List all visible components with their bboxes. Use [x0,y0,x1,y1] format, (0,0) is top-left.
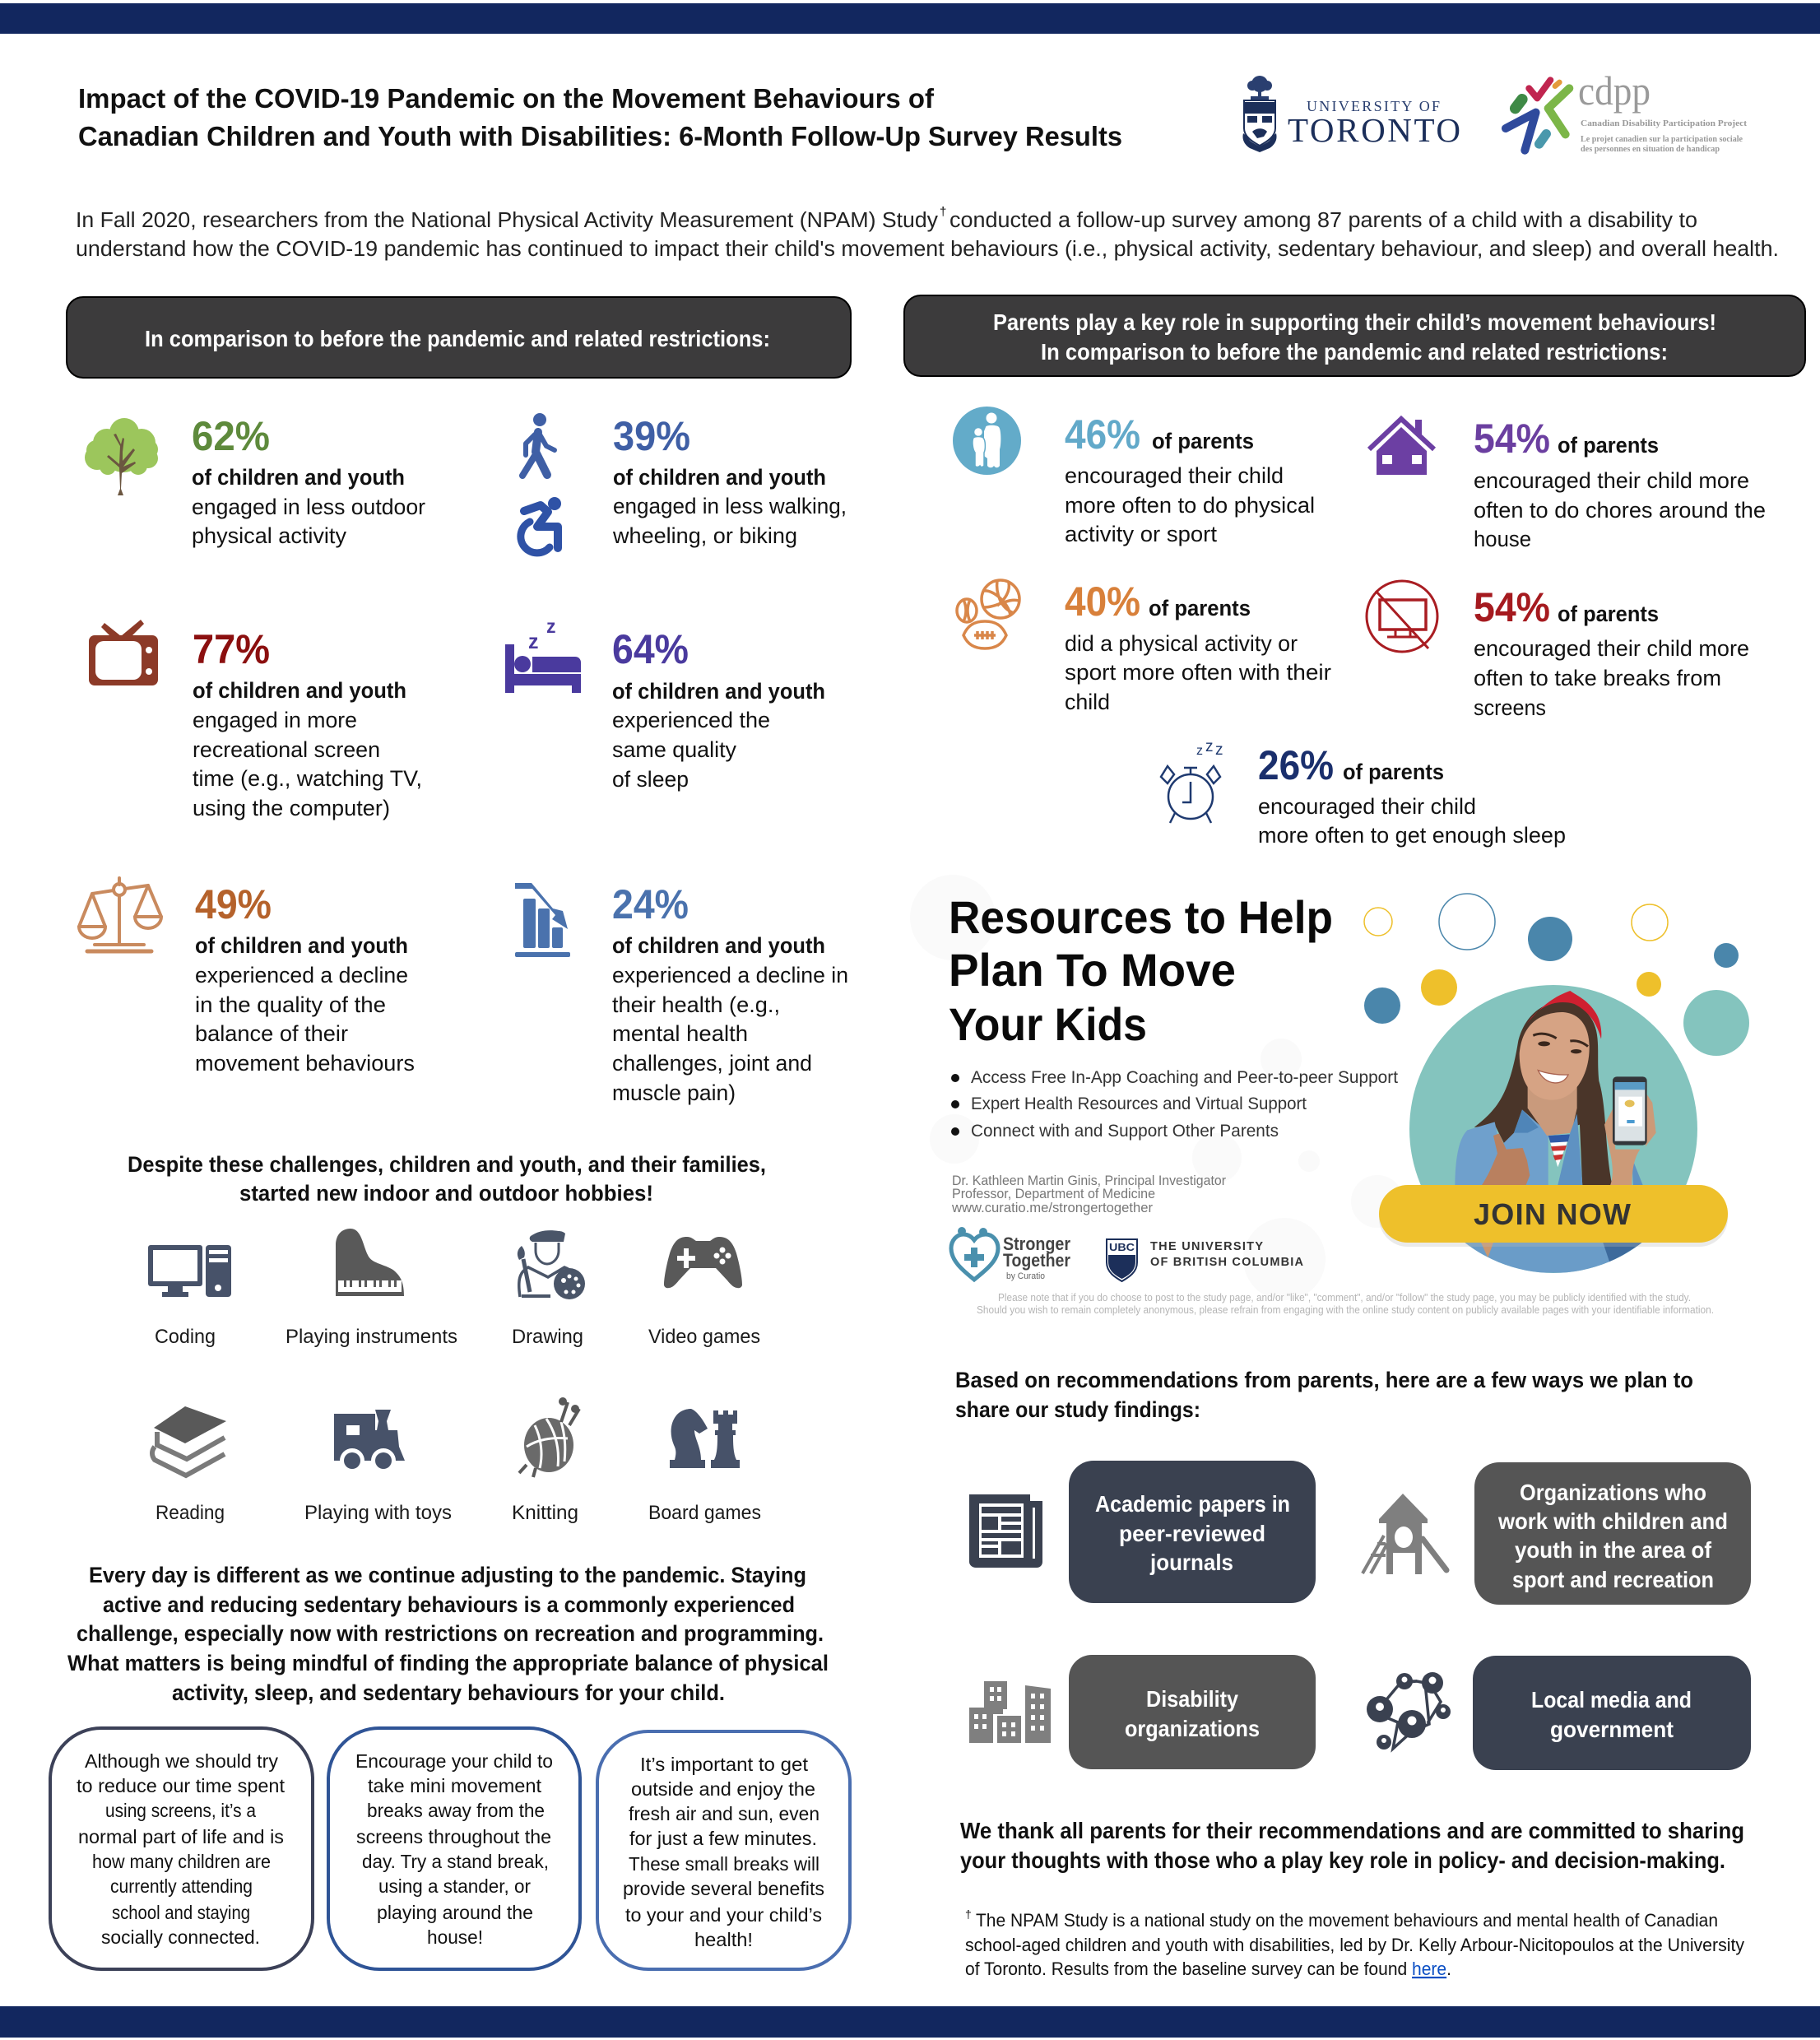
icon: declining bar chart [515,883,570,957]
box: disability organizations: organizations [1125,1716,1260,1741]
stat: 39 percent walking [612,413,847,548]
text: every day message: challenge, especially now with restrictions on recreation and programming. [77,1621,824,1646]
panel: hobbies [148,1229,761,1524]
title: Canadian Children and Youth with Disabilities: 6-Month Follow-Up Survey Results [78,121,1122,151]
stat: 46 percent physical activity: of parents [1152,429,1254,453]
stat: 24 percent health [612,881,848,1105]
button: join now: JOIN NOW [1474,1197,1631,1231]
logo: CDPP: cdpp [1578,67,1651,114]
icon: balance scale [79,878,161,951]
logo: CDPP [1506,67,1747,154]
callout: fresh air: outside and enjoy the [631,1778,815,1800]
title [78,83,1122,151]
text: disclaimer: Please note that if you do choose to post to the study page, and/or "like", "comment", and/or "follow" the study page, you may be publicly identified with the study. [998,1291,1691,1303]
hobby: playing with toys [304,1410,452,1524]
callout: screens are normal: using screens, it’s a [105,1800,257,1821]
stat: 24 percent health: their health (e.g., [612,992,780,1017]
icon: television [89,620,158,685]
heading: despite these challenges [128,1152,766,1206]
hobby: playing instruments: Playing instruments [286,1326,457,1348]
stat: 26 percent sleep [1258,742,1566,848]
text: disclaimer [977,1291,1714,1316]
stat: 77 percent screen time: time (e.g., watching TV, [193,766,422,791]
stat: 64 percent sleep: same quality [612,737,736,762]
box: organizations sport and recreation: Organizations who [1520,1480,1706,1505]
list: benefits: Expert Health Resources and Virtual Support [971,1094,1307,1113]
stat: 54 percent screen breaks [1474,584,1749,720]
callout: screens are normal: normal part of life and is [78,1826,284,1847]
stat: 54 percent chores: house [1474,527,1531,551]
logo: Stronger Together: by Curatio [1006,1271,1045,1281]
box: local media and government [1473,1656,1751,1770]
panel: sharing channels [969,1461,1751,1770]
logo: Stronger Together [951,1227,1070,1281]
logo: CDPP: des personnes en situation de handicap [1581,145,1720,154]
text: investigator credit: Dr. Kathleen Martin Ginis, Principal Investigator [952,1173,1226,1188]
heading: resources: Your Kids [949,998,1147,1050]
hobby: coding [148,1245,231,1348]
hobby: video games [648,1237,760,1348]
stat: 24 percent health: mental health [612,1021,748,1046]
stat: 46 percent physical activity: more often to do physical [1065,493,1315,518]
stat: 62 percent outdoor activity [192,413,425,548]
panel: right header: In comparison to before the pandemic and related restrictions: [1041,339,1668,365]
stat: 77 percent screen time [193,626,422,820]
callout: mini movement breaks: day. Try a stand break, [362,1851,549,1872]
callout: mini movement breaks: Encourage your child to [355,1750,553,1772]
stat: 49 percent balance: experienced a decline [195,963,408,987]
box: organizations sport and recreation: youth in the area of [1515,1537,1712,1563]
stat: 64 percent sleep [612,626,825,792]
callout: screens are normal: currently attending [110,1875,253,1897]
logo: Stronger Together: Together [1003,1250,1070,1271]
panel: right header [904,295,1805,376]
callout: mini movement breaks: take mini movement [368,1775,541,1796]
stat: 39 percent walking: wheeling, or biking [612,523,797,548]
stat: 39 percent walking: engaged in less walking, [613,494,847,518]
stat: 24 percent health: muscle pain) [612,1080,736,1105]
logo: University of Toronto [1242,76,1460,152]
callout: screens are normal: Although we should try [85,1750,278,1772]
box: organizations sport and recreation [1474,1462,1751,1605]
icon: parent and child [953,407,1021,475]
stat: 40 percent together [1065,579,1331,714]
stat: 54 percent chores: encouraged their child more [1474,468,1749,493]
icon: wheelchair [521,497,561,553]
logo: CDPP: Le projet canadien sur la participation sociale [1581,135,1743,144]
callout: mini movement breaks [328,1728,580,1969]
stat: 49 percent balance: movement behaviours [195,1051,415,1076]
stat: 46 percent physical activity: encouraged their child [1065,463,1284,488]
stat: 54 percent screen breaks: 54% [1474,584,1550,630]
icon: newspaper [969,1494,1042,1568]
stat: 54 percent chores: often to do chores around the [1474,498,1766,523]
callout: fresh air [597,1731,850,1969]
stat: 40 percent together: child [1065,690,1110,714]
logo: UBC: OF BRITISH COLUMBIA [1150,1256,1304,1269]
text: investigator credit: www.curatio.me/strongertogether [951,1200,1153,1215]
icon: alarm clock: z [1196,744,1203,758]
hobby: reading: Reading [156,1502,225,1524]
icon: people network [1367,1672,1451,1750]
stat: 54 percent chores: of parents [1558,433,1659,458]
icon: bed with sleep letters: z [546,616,556,637]
intro text: In Fall 2020, researchers from the National Physical Activity Measurement (NPAM) Study [76,209,938,232]
box: local media and government: Local media and [1531,1687,1692,1712]
callout: screens are normal: socially connected. [101,1926,260,1948]
callout: fresh air: provide several benefits [623,1878,824,1899]
heading: despite these challenges: Despite these challenges, children and youth, and their families, [128,1152,766,1177]
callout: screens are normal: to reduce our time spent [77,1775,285,1796]
box: disability organizations: Disability [1146,1686,1238,1712]
stat: 40 percent together: 40% [1065,579,1140,625]
hobby: playing with toys: Playing with toys [304,1502,452,1524]
text: every day message: Every day is different as we continue adjusting to the pandemic. Staying [89,1563,806,1587]
stat: 64 percent sleep: 64% [612,626,689,672]
stat: 64 percent sleep: of children and youth [612,679,825,704]
decorative dots [1364,894,1749,1056]
heading: resources: Resources to Help [949,891,1333,943]
callout: fresh air: to your and your child’s [625,1904,822,1926]
stat: 24 percent health: of children and youth [612,933,825,958]
bottom banner [0,2006,1820,2038]
stat: 49 percent balance: of children and youth [195,933,408,958]
stat: 77 percent screen time: engaged in more [193,708,357,732]
box: academic papers: journals [1149,1550,1233,1575]
stat: 46 percent physical activity: 46% [1065,411,1140,458]
hobby: drawing [512,1230,585,1348]
stat: 49 percent balance: balance of their [195,1021,348,1046]
callout: fresh air: for just a few minutes. [629,1828,817,1849]
hobby: board games [648,1409,761,1524]
hobby: drawing: Drawing [512,1326,583,1348]
callout: mini movement breaks: playing around the [377,1902,533,1923]
stat: 62 percent outdoor activity: engaged in less outdoor [192,495,425,519]
text: footnote: school-aged children and youth with disabilities, led by Dr. Kelly Arbour-Nicitopoulos at the University [965,1935,1744,1955]
heading: despite these challenges: started new indoor and outdoor hobbies! [239,1181,653,1206]
stat: 24 percent health: 24% [612,881,689,927]
list: benefits: Access Free In-App Coaching and Peer-to-peer Support [971,1068,1398,1087]
heading: plan to share findings: Based on recommendations from parents, here are a few ways we plan to [955,1368,1693,1392]
stat: 54 percent screen breaks: of parents [1558,602,1659,626]
intro text: † [940,205,946,219]
icon: sports balls [957,580,1019,648]
text: disclaimer: Should you wish to remain completely anonymous, please refrain from engaging with the online study content on publicly available pages with your identifiable information. [977,1303,1714,1316]
stat: 26 percent sleep: of parents [1343,760,1444,784]
callout: mini movement breaks: house! [427,1926,483,1948]
icon: alarm clock: z [1205,738,1213,755]
text: footnote: The NPAM Study is a national study on the movement behaviours and mental health of Canadian [976,1910,1718,1931]
stat: 77 percent screen time: 77% [193,626,270,672]
stat: 54 percent chores [1474,416,1766,551]
box: organizations sport and recreation: work with children and [1497,1508,1728,1534]
hobby: playing instruments [286,1229,457,1348]
intro text [76,205,1779,261]
stat: 64 percent sleep: experienced the [612,708,770,732]
text: every day message: activity, sleep, and sedentary behaviours for your child. [172,1680,725,1705]
stat: 46 percent physical activity: activity or sport [1065,522,1217,546]
stat: 26 percent sleep: more often to get enough sleep [1258,823,1566,848]
stat: 39 percent walking: of children and youth [613,465,826,490]
text: footnote: of Toronto. Results from the baseline survey can be found here. [965,1959,1451,1979]
logo: CDPP: Canadian Disability Participation Project [1581,118,1747,128]
logo: UBC [1107,1239,1304,1281]
stat: 54 percent chores: 54% [1474,416,1550,462]
stat: 40 percent together: sport more often with their [1065,660,1331,685]
callout: screens are normal: school and staying [112,1902,250,1923]
box: academic papers: Academic papers in [1095,1491,1290,1517]
panel: left header: In comparison to before the pandemic and related restrictions: [145,326,770,351]
text: investigator credit [951,1173,1226,1215]
icon: playground [1363,1494,1446,1574]
callout: fresh air: These small breaks will [629,1853,819,1875]
icon: tree [85,418,158,495]
hobby: coding: Coding [155,1326,216,1348]
logo: University of Toronto: TORONTO [1288,111,1460,149]
box: disability organizations [1069,1655,1316,1769]
text: investigator credit: Professor, Department of Medicine [952,1186,1155,1201]
text: footnote: † [965,1908,972,1921]
stat: 77 percent screen time: recreational screen [193,737,380,762]
logo: UBC: THE UNIVERSITY [1150,1240,1263,1253]
stat: 24 percent health: experienced a decline in [612,963,848,987]
box: local media and government: government [1550,1717,1674,1742]
stat: 26 percent sleep: 26% [1258,742,1334,788]
top banner [0,3,1820,34]
logo: UBC: UBC [1109,1241,1135,1253]
callout: fresh air: health! [694,1929,753,1950]
stat: 77 percent screen time: using the computer) [193,796,390,820]
icon: no screens [1367,581,1437,652]
box: academic papers: peer-reviewed [1119,1521,1265,1546]
stat: 26 percent sleep: encouraged their child [1258,794,1476,819]
text: thank you: your thoughts with those who a play key role in policy- and decision-making. [960,1847,1725,1873]
icon: bed with sleep letters [505,616,581,693]
text: every day message: active and reducing sedentary behaviours is a commonly experienced [103,1592,795,1617]
text: every day message: What matters is being mindful of finding the appropriate balance of physical [67,1651,829,1675]
heading: plan to share findings: share our study findings: [955,1397,1200,1422]
stat: 40 percent together: did a physical activity or [1065,631,1298,656]
stat: 62 percent outdoor activity: physical activity [192,523,346,548]
hobby: video games: Video games [648,1326,760,1348]
box: academic papers [1069,1461,1316,1603]
list: benefits [951,1068,1398,1141]
hobby: board games: Board games [648,1502,761,1524]
text: footnote [965,1908,1744,1979]
button: join now [1379,1185,1728,1247]
heading: resources: Plan To Move [949,944,1236,996]
panel: children statistics [79,413,848,1105]
stat: 54 percent screen breaks: screens [1474,695,1546,720]
stat: 77 percent screen time: of children and youth [193,678,406,703]
list: benefits: Connect with and Support Other Parents [971,1122,1279,1141]
stat: 24 percent health: challenges, joint and [612,1051,812,1076]
box: organizations sport and recreation: sport and recreation [1512,1567,1714,1592]
heading: resources [949,891,1333,1050]
stat: 62 percent outdoor activity: of children and youth [192,465,405,490]
text: thank you [960,1818,1744,1873]
stat: 62 percent outdoor activity: 62% [192,413,270,459]
icon: bed with sleep letters: z [528,630,538,653]
callout: mini movement breaks: breaks away from the [367,1800,545,1821]
title: Impact of the COVID-19 Pandemic on the Movement Behaviours of [78,83,935,114]
stat: 54 percent screen breaks: encouraged their child more [1474,636,1749,661]
stat: 46 percent physical activity [1065,411,1315,546]
stat: 40 percent together: of parents [1149,596,1251,620]
callout: mini movement breaks: using a stander, or [378,1875,531,1897]
panel: right header: Parents play a key role in supporting their child’s movement behaviours! [993,309,1716,335]
stat: 49 percent balance: in the quality of the [195,992,386,1017]
panel: left header [67,297,851,378]
stat: 39 percent walking: 39% [613,413,690,459]
photo: smiling woman holding phone [1409,985,1697,1273]
callout: mini movement breaks: screens throughout the [356,1826,551,1847]
hobby: knitting: Knitting [512,1502,578,1524]
hobby: knitting [512,1397,579,1524]
icon: buildings [969,1681,1051,1743]
callout: screens are normal [50,1728,313,1969]
text: thank you: We thank all parents for their recommendations and are committed to sharing [960,1818,1744,1843]
hobby: reading [152,1406,226,1524]
stat: 49 percent balance [195,881,415,1076]
logo: Stronger Together: Stronger [1003,1234,1070,1254]
heading: plan to share findings [955,1368,1693,1422]
icon: house [1369,419,1434,475]
icon: alarm clock: z [1215,741,1223,759]
callout: fresh air: fresh air and sun, even [629,1803,819,1824]
panel: resources advertisement [910,875,1749,1316]
text: every day message [67,1563,829,1705]
panel: parents statistics [953,407,1766,848]
stat: 64 percent sleep: of sleep [612,767,689,792]
logo: University of Toronto: UNIVERSITY OF [1307,98,1440,114]
icon: alarm clock [1161,738,1223,823]
callout: screens are normal: how many children are [92,1851,271,1872]
intro text: conducted a follow-up survey among 87 parents of a child with a disability to [949,209,1697,232]
stat: 49 percent balance: 49% [195,881,272,927]
stat: 54 percent screen breaks: often to take breaks from [1474,666,1721,690]
intro text: understand how the COVID-19 pandemic has continued to impact their child's movement behaviours (i.e., physical activity, sedentary behaviour, and sleep) and overall health. [76,238,1779,261]
callout: fresh air: It’s important to get [640,1754,808,1775]
icon: walker [522,413,555,476]
